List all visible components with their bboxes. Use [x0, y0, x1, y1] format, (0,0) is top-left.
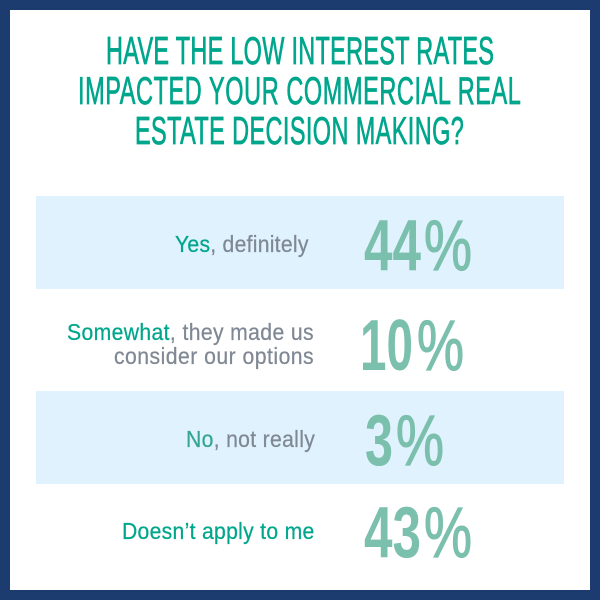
- value: 3%: [365, 401, 444, 481]
- label: no, not really: No, not really: [186, 426, 315, 452]
- value: 3%: %: [396, 402, 444, 481]
- value: 3%: 3: [365, 401, 393, 481]
- title: ESTATE DECISION MAKING?: [135, 109, 464, 152]
- title: [78, 29, 521, 152]
- value: 44%: 44: [364, 206, 421, 286]
- title: HAVE THE LOW INTEREST RATES: [106, 29, 494, 72]
- row: somewhat: [67, 306, 464, 386]
- value: 44%: %: [424, 207, 472, 286]
- label: somewhat, they made us consider our options: Somewhat, they made us: [67, 319, 314, 345]
- label: doesn't apply to me: Doesn’t apply to me: [122, 518, 314, 544]
- row: yes, definitely: [36, 196, 564, 289]
- row: doesn't apply to me: [122, 493, 472, 573]
- value: 10%: %: [417, 307, 464, 386]
- row: no, not really: [36, 391, 564, 484]
- label: somewhat, they made us consider our options: consider our options: [114, 343, 314, 369]
- label: yes, definitely: Yes, definitely: [175, 231, 308, 257]
- value: 43%: %: [424, 494, 472, 573]
- label: somewhat, they made us consider our options: [67, 319, 314, 369]
- value: 43%: 43: [364, 493, 421, 573]
- title: IMPACTED YOUR COMMERCIAL REAL: [78, 69, 521, 112]
- value: 10%: 10: [360, 306, 413, 386]
